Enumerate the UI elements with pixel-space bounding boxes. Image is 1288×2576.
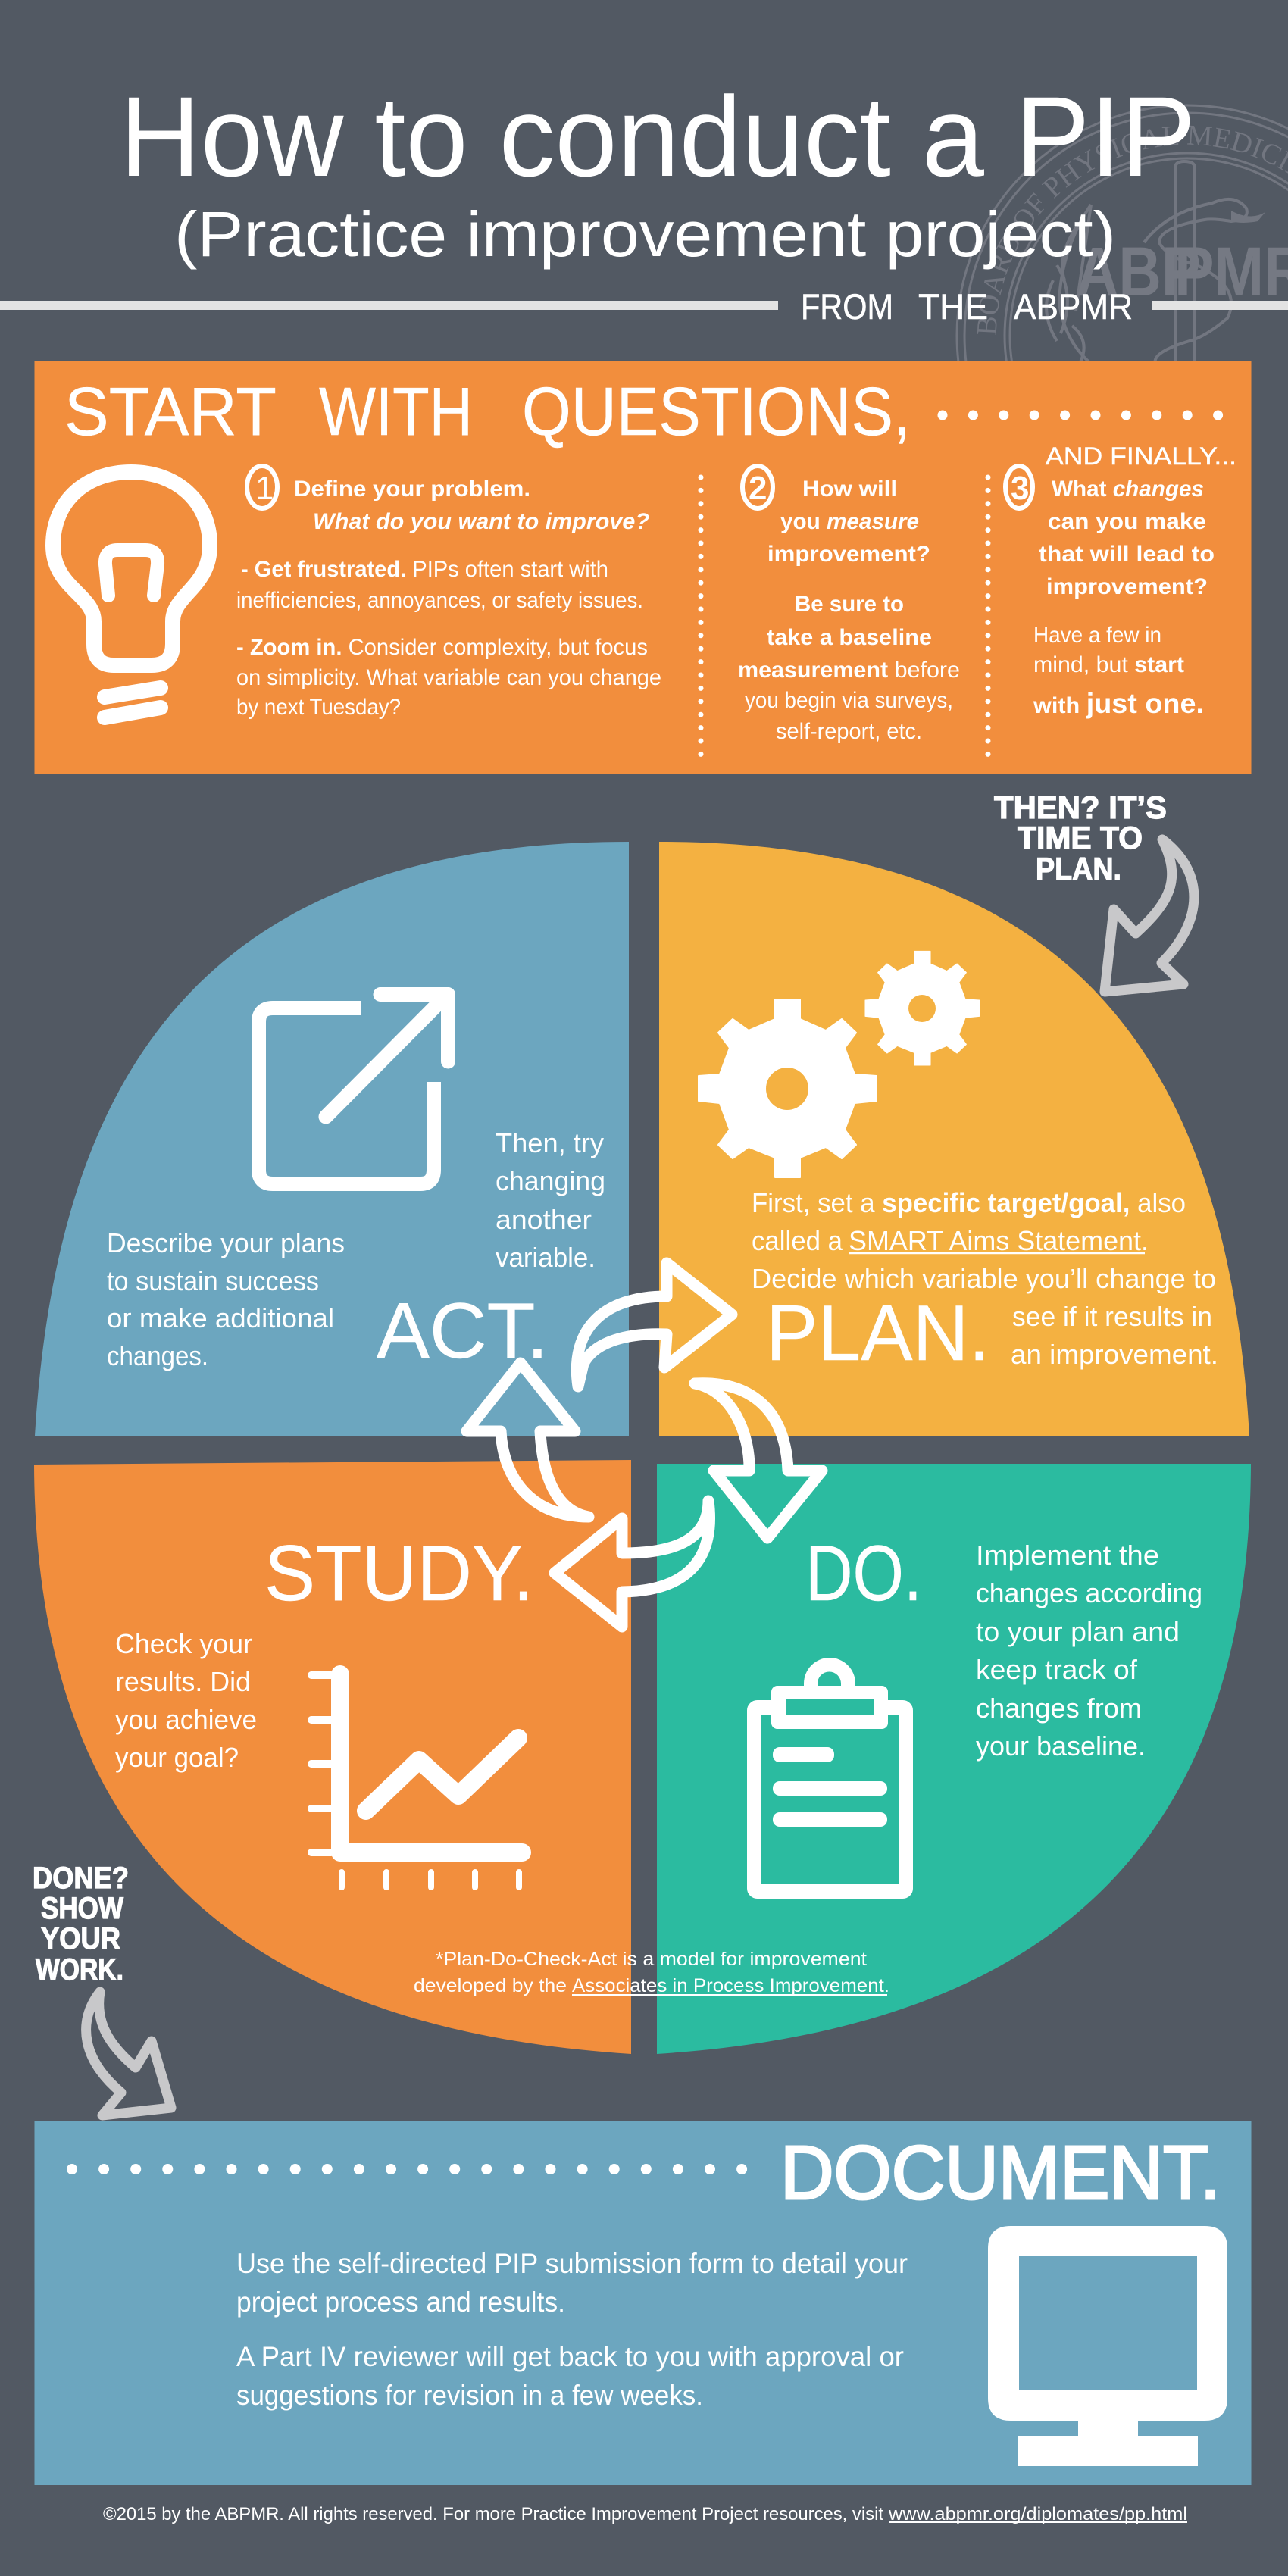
text: study description: you achieve <box>115 1704 257 1735</box>
callout: done? show your work: YOUR <box>41 1922 120 1955</box>
text: do description: your baseline. <box>976 1730 1146 1762</box>
text: plan description: called a <box>752 1225 843 1256</box>
step 3 text: mind, but start <box>1033 652 1184 677</box>
step 2 text <box>738 477 960 744</box>
text: document description: A Part IV reviewer will get back to you with approval or <box>236 2341 904 2372</box>
step 3 text: What changes <box>1052 477 1204 502</box>
step 1 number <box>247 466 277 508</box>
heading: act: ACT. <box>377 1287 549 1375</box>
text: act description: to sustain success <box>107 1265 319 1296</box>
byline: from the ABPMR <box>801 286 1133 327</box>
quadrant: plan <box>659 842 1249 1436</box>
step 3 text: improvement? <box>1046 574 1208 599</box>
large gear <box>699 999 877 1177</box>
byline: from the ABPMR: ABPMR <box>1014 286 1133 327</box>
step 3 number: 3 <box>1011 470 1029 507</box>
text: plan description <box>752 1187 1218 1370</box>
arrow: gray arrow to document <box>86 1992 171 2115</box>
heading: document: DOCUMENT. <box>780 2131 1221 2215</box>
step 3 text: with just one. <box>1033 688 1204 719</box>
callout: then it's time to plan <box>994 789 1167 886</box>
dotted leader <box>72 2164 742 2174</box>
text: do description <box>976 1540 1202 1762</box>
dotted divider 1 <box>699 477 703 755</box>
step 1 text: on simplicity. What variable can you change <box>236 665 661 690</box>
text: plan description: Decide which variable you’ll change to <box>752 1263 1216 1294</box>
text: then try: another <box>496 1204 592 1235</box>
text: document description <box>236 2248 908 2411</box>
step 2 text: Be sure to <box>795 592 904 617</box>
quadrant: study <box>34 1460 631 2054</box>
heading: do: DO. <box>805 1530 922 1618</box>
footer: ©2015 by the ABPMR. All rights reserved. For more Practice Improvement Project resources, visit <box>103 2504 883 2524</box>
text: document description: Use the self-directed PIP submission form to detail your <box>236 2248 908 2279</box>
watermark: ABPMR seal: ABP <box>1076 233 1201 311</box>
quadrant: act <box>35 842 629 1436</box>
step 2 text: you begin via surveys, <box>745 688 953 713</box>
icon: light bulb <box>53 472 210 717</box>
text: plan description: First, set a specific target/goal, also <box>752 1187 1186 1218</box>
byline: from the ABPMR: FROM <box>801 286 893 327</box>
footnote: developed by the <box>414 1975 567 1996</box>
step 3 text <box>1033 477 1215 719</box>
step 1 number: 1 <box>255 470 274 507</box>
text: do description: changes from <box>976 1693 1142 1724</box>
subtitle: (Practice improvement project) <box>174 199 1116 270</box>
text: study description <box>115 1628 257 1773</box>
footnote: Associates in Process Improvement. <box>572 1975 889 1996</box>
dotted divider 2 <box>985 477 991 755</box>
icon: line chart <box>311 1674 522 1887</box>
text: document description: project process and results. <box>236 2287 565 2318</box>
step 1 text <box>236 477 661 720</box>
arrow: plan to do <box>695 1383 822 1538</box>
heading: start with questions: WITH <box>319 374 473 450</box>
quadrant: do <box>657 1464 1251 2054</box>
heading: start with questions: QUESTIONS, <box>522 374 911 450</box>
arrow: do to study <box>555 1501 710 1627</box>
callout: done? show your work: WORK. <box>36 1953 123 1987</box>
title: How to conduct a PIP <box>120 73 1196 200</box>
step 2 text: you measure <box>780 509 919 534</box>
step 2 text: take a baseline <box>767 625 932 650</box>
step 3 text: can you make <box>1048 509 1206 534</box>
text: do description: to your plan and <box>976 1616 1180 1647</box>
header rule left <box>0 301 778 310</box>
step 2 text: improvement? <box>767 542 930 567</box>
text: study description: Check your <box>115 1628 252 1659</box>
text: act description: or make additional <box>107 1302 334 1333</box>
callout: done? show your work: SHOW <box>41 1892 123 1925</box>
text: do description: Implement the <box>976 1540 1159 1571</box>
step 2 text: self-report, etc. <box>776 719 922 744</box>
text: act description: Describe your plans <box>107 1227 345 1258</box>
panel: document <box>35 2121 1252 2485</box>
text: act description <box>107 1227 345 1371</box>
arrow: study to act <box>467 1363 589 1517</box>
heading: start with questions: START <box>64 374 277 450</box>
step 3 text: that will lead to <box>1039 542 1215 567</box>
text: then try: Then, try <box>496 1127 604 1158</box>
and finally label: AND FINALLY... <box>1046 442 1236 470</box>
step 1 text: What do you want to improve? <box>313 509 649 534</box>
step 1 text: Define your problem. <box>294 477 530 502</box>
text: act description: changes. <box>107 1340 208 1371</box>
text: do description: changes according <box>976 1577 1202 1608</box>
footnote <box>414 1949 889 1996</box>
panel: start with questions <box>35 361 1252 774</box>
heading: study: STUDY. <box>264 1530 534 1618</box>
callout: then it's time to plan: THEN? IT’S <box>994 789 1167 825</box>
icon: clipboard <box>755 1658 906 1891</box>
step 1 text: inefficiencies, annoyances, or safety issues. <box>236 588 643 613</box>
step 1 text: - Zoom in. Consider complexity, but focus <box>236 635 648 660</box>
text: do description: keep track of <box>976 1654 1138 1685</box>
step 2 number: 2 <box>749 470 767 507</box>
dotted leader <box>943 411 1218 420</box>
callout: done? show your work: DONE? <box>33 1862 129 1895</box>
header rule right <box>1152 301 1288 310</box>
text: plan description: SMART Aims Statement. <box>849 1225 1149 1256</box>
step 1 text: by next Tuesday? <box>236 695 401 720</box>
text: plan description: an improvement. <box>1011 1339 1218 1370</box>
arrow: gray arrow to plan <box>1105 839 1194 992</box>
step 2 text: measurement before <box>738 658 960 683</box>
step 3 text: Have a few in <box>1033 623 1161 648</box>
text: then try <box>496 1127 605 1273</box>
heading: plan: PLAN. <box>766 1290 990 1377</box>
icon: computer monitor <box>988 2226 1227 2466</box>
heading: start with questions <box>64 374 911 450</box>
text: then try: changing <box>496 1165 605 1196</box>
footer: www.abpmr.org/diplomates/pp.html <box>888 2504 1187 2524</box>
arrow: act to plan <box>577 1263 732 1386</box>
byline: from the ABPMR: THE <box>918 286 988 327</box>
callout: done? show your work <box>33 1862 129 1987</box>
callout: then it's time to plan: TIME TO <box>1018 820 1143 855</box>
text: then try: variable. <box>496 1242 596 1273</box>
text: plan description: see if it results in <box>1012 1301 1212 1332</box>
text: study description: your goal? <box>115 1742 239 1773</box>
text: document description: suggestions for revision in a few weeks. <box>236 2380 703 2411</box>
text: study description: results. Did <box>115 1666 251 1697</box>
step 1 text: - Get frustrated. PIPs often start with <box>241 557 608 582</box>
icon: gears <box>699 951 980 1177</box>
footnote: *Plan-Do-Check-Act is a model for improvement <box>436 1949 867 1970</box>
callout: then it's time to plan: PLAN. <box>1036 851 1121 886</box>
step 2 text: How will <box>802 477 897 502</box>
step 3 number <box>1005 466 1033 508</box>
step 2 number <box>742 466 773 508</box>
cycle arrows <box>467 1263 822 1627</box>
icon: external action arrow <box>259 994 449 1183</box>
small gear <box>865 951 980 1065</box>
